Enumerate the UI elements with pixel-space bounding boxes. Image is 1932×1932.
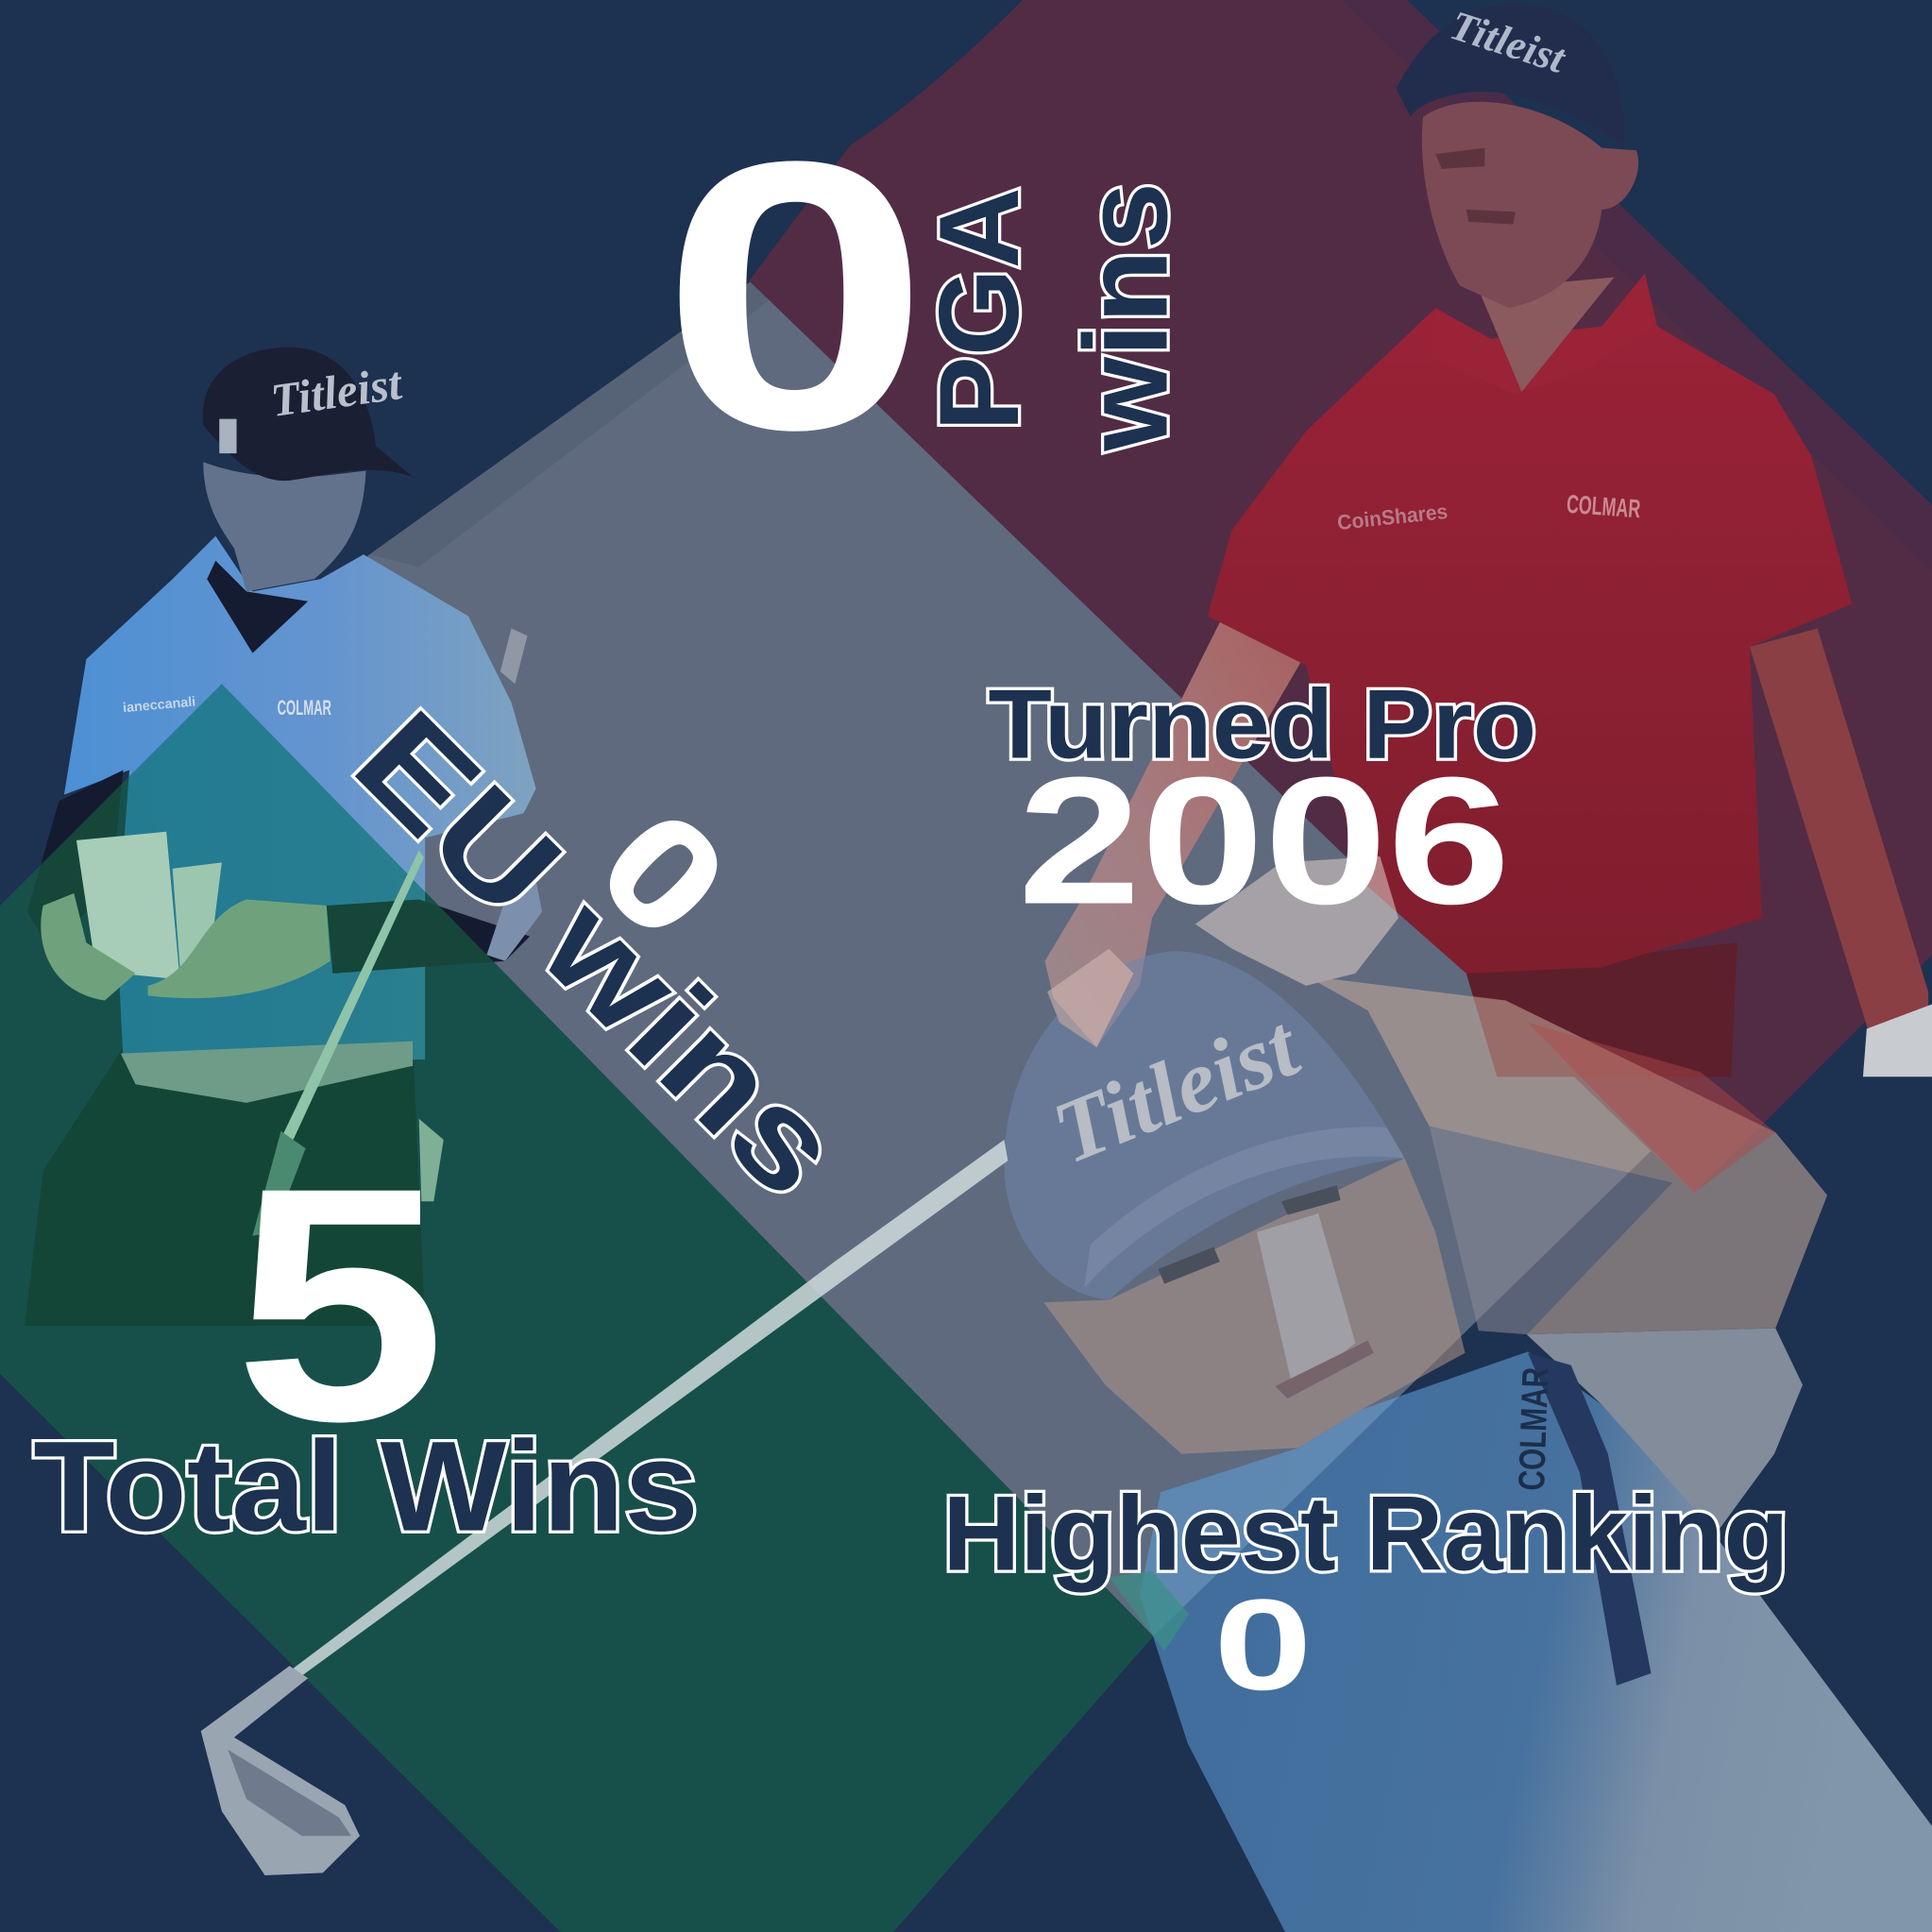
photo: golfer in red shirt: CoinShares [1336,500,1449,534]
label: wins: wins [1060,182,1193,452]
stat: EU wins number: 0 [568,780,758,970]
panel: maroon diamond [749,0,1932,1193]
photo: golfer swinging: COLMAR [1512,1366,1557,1491]
photo: hands, score cards, belt and putter [41,832,444,1236]
photo: golfer in blue shirt [25,347,542,1326]
photo: golfer in red shirt: Titleist [1445,1,1572,82]
photo: golfer in blue shirt: Titleist [268,357,407,427]
panel: grey diamond [222,281,1651,1636]
photo: golfer in blue shirt: COLMAR [278,696,331,720]
label: Highest Ranking: Highest Ranking [942,1473,1789,1592]
stat: PGA wins number: 0 [660,82,930,509]
label: PGA: PGA [916,187,1042,432]
photo: golfer swinging [201,856,1932,1932]
panel: green diamond [0,684,1153,1932]
label: EU wins: EU wins [327,683,870,1225]
photo: golfer in blue shirt: ianeccanali [122,695,196,716]
stat: highest ranking number: 0 [1213,1573,1313,1718]
photo: golfer in red shirt [1045,1,1932,1076]
photo: golfer swinging: Titleist [1041,996,1313,1183]
photo: golfer in red shirt: COLMAR [1566,489,1641,523]
label: Total Wins: Total Wins [33,1415,699,1558]
stat: total wins number: 5 [234,1118,446,1490]
label: Turned Pro: Turned Pro [988,669,1536,779]
stat: 2006: 2006 [1018,738,1511,941]
